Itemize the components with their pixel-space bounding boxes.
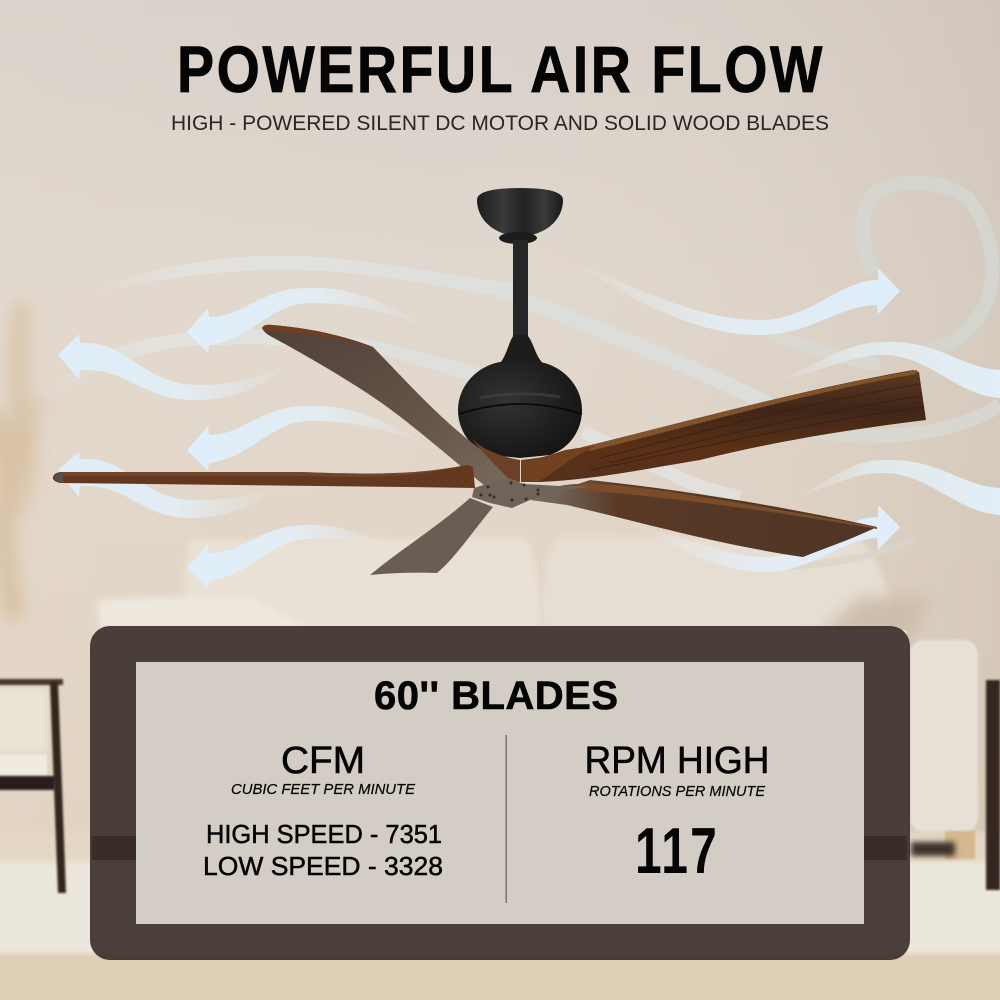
caption: cubic feet per minute: CUBIC FEET PER MINUTE <box>231 782 415 798</box>
value: RPM: 117 <box>635 814 719 887</box>
panel: light card <box>136 662 864 924</box>
subtitle: HIGH - POWERED SILENT DC MOTOR AND SOLID WOOD BLADES <box>171 112 829 135</box>
arrow: lower right <box>633 505 900 572</box>
fan hub <box>472 478 590 508</box>
heading: RPM high: RPM HIGH <box>584 740 770 782</box>
arrow: upper left short <box>187 288 430 353</box>
arrow: far left upper <box>58 334 293 400</box>
panel: dark frame <box>90 626 910 960</box>
title: POWERFUL AIR FLOW <box>177 32 825 106</box>
heading: CFM: CFM <box>281 740 365 782</box>
blade: lower right <box>530 480 877 557</box>
airflow ribbon: right lower <box>790 460 1000 515</box>
value: high speed: HIGH SPEED - 7351 <box>206 819 442 849</box>
ceiling fan <box>53 188 926 575</box>
fan collar <box>499 232 537 244</box>
blade: upper left <box>262 325 520 490</box>
airflow ribbons behind fan <box>40 183 1000 566</box>
arrow: lower left short <box>187 525 393 589</box>
fan downrod <box>513 240 528 340</box>
value: low speed: LOW SPEED - 3328 <box>203 851 443 881</box>
fan motor housing <box>458 335 582 458</box>
heading: blade size: 60'' BLADES <box>374 674 618 718</box>
arrow: middle left short <box>187 406 430 471</box>
fan canopy <box>477 188 563 236</box>
blade: lower left small <box>370 498 493 575</box>
blade: left long <box>53 465 475 488</box>
arrow: far left lower <box>58 452 273 518</box>
airflow ribbon: right upper <box>767 342 1000 398</box>
blade: right large <box>521 370 926 482</box>
column divider <box>506 735 507 903</box>
arrow: upper right <box>573 262 900 335</box>
specification panel <box>90 626 910 960</box>
caption: rotations per minute: ROTATIONS PER MINUTE <box>589 784 765 800</box>
